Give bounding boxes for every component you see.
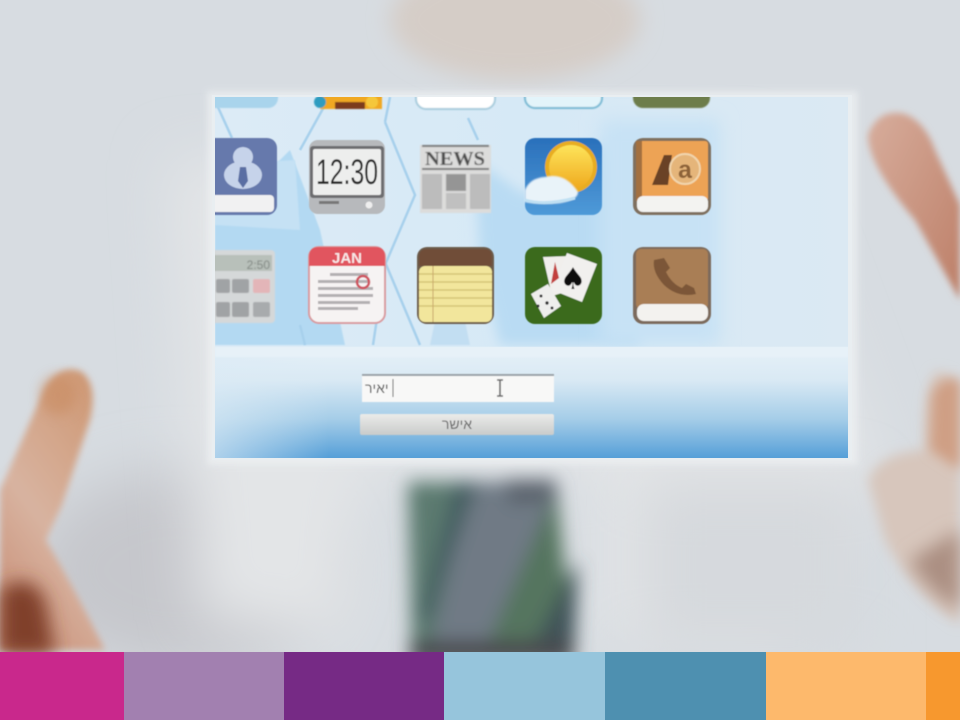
confirm button: אישר bbox=[442, 416, 472, 432]
icon: calculator bbox=[215, 250, 276, 324]
icon: phone book bbox=[633, 247, 711, 324]
icon: calendar: JAN bbox=[332, 250, 362, 267]
blurred photo background: person in white shirt bbox=[48, 0, 646, 652]
icon: clock 12:30 bbox=[309, 140, 385, 214]
tie bbox=[408, 480, 578, 665]
icon: dictionary book: a bbox=[678, 156, 693, 184]
icon: news bbox=[420, 145, 491, 213]
icon: notepad bbox=[417, 247, 494, 324]
map shapes and lines bbox=[215, 150, 345, 345]
icon: contacts book bbox=[215, 137, 278, 216]
icon: news: NEWS bbox=[425, 148, 485, 170]
panel: transparent screen bbox=[196, 70, 858, 465]
text input bbox=[362, 374, 554, 402]
icon: dictionary book bbox=[633, 138, 711, 215]
icon: cards and dice: ♠ bbox=[560, 262, 586, 297]
text cursor bbox=[497, 380, 503, 396]
icon: calendar bbox=[309, 247, 385, 323]
right hand bbox=[868, 113, 960, 625]
partial top row icons bbox=[215, 97, 711, 110]
icon: weather bbox=[525, 138, 602, 215]
icon: clock 12:30: 12:30 bbox=[316, 153, 378, 192]
text input: יאיר bbox=[365, 380, 389, 396]
left hand bbox=[0, 369, 105, 655]
confirm button bbox=[360, 414, 554, 435]
icon: calculator: 2:50 bbox=[247, 258, 270, 272]
icon: cards and dice bbox=[525, 247, 602, 324]
colour stripe band bbox=[0, 652, 960, 720]
